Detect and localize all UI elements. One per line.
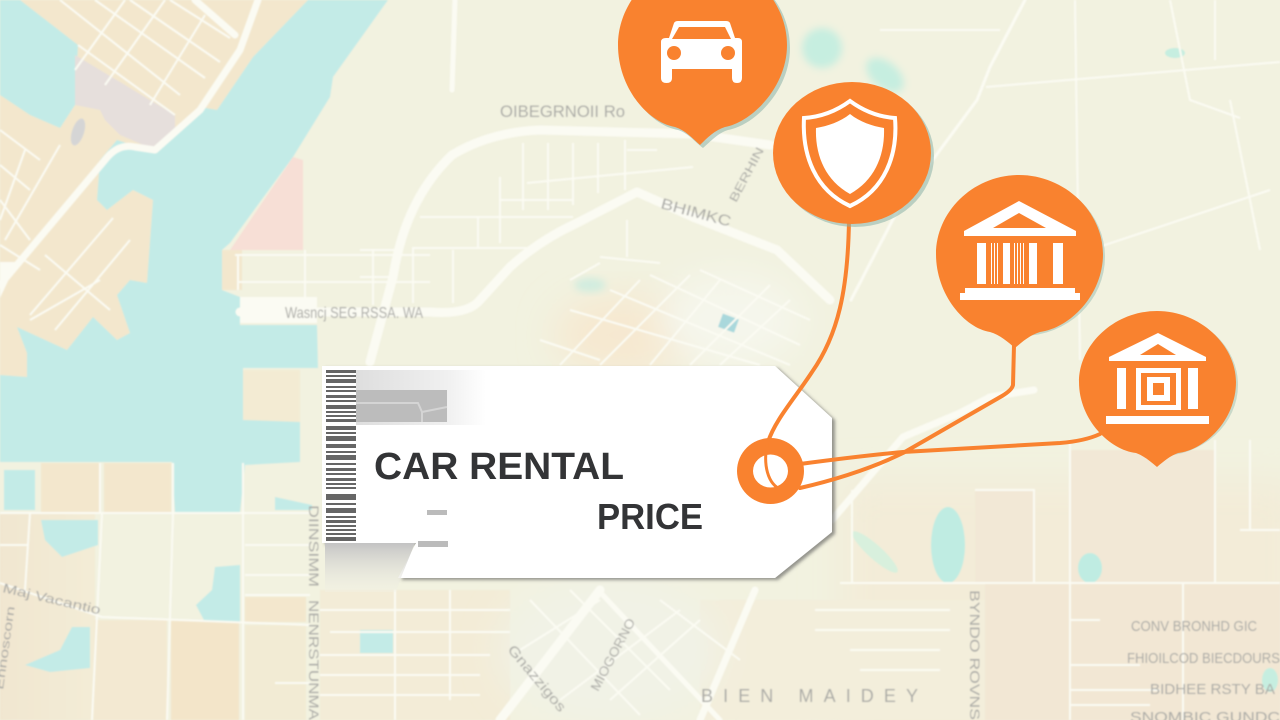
map label: south east neighbourhood: BIEN MAIDEY [701,686,923,706]
pin: car [618,0,790,148]
barcode [326,370,356,541]
map label: vertical by tag: DIINSIMM [306,505,322,587]
icon: small bank [1106,333,1209,424]
pin: bank [936,175,1105,348]
heading: car rental: CAR RENTAL [374,446,624,488]
map label: south centre diagonal: Gnazzigos [505,642,570,715]
map: lower right warm tint [840,480,1280,720]
map label: south centre reverse diagonal: MIOGORNO [587,616,638,693]
map label: south east list one: CONV BRONHD GIC [1131,618,1257,635]
map: pale south downtown wash [500,580,720,720]
tag body [322,366,832,578]
price tag [322,366,832,592]
icon: car [661,21,742,83]
map: road slip patches [0,262,317,323]
map: pale green ponds [574,28,1278,692]
pin: shield [773,82,934,227]
tag grey block [356,390,447,422]
string to small bank pin [800,434,1100,464]
map label: diagonal street: BERHIN [726,145,767,204]
map: soft orange district tint [555,295,695,375]
icon: shield [804,101,895,206]
map: colored land patches [75,55,175,150]
heading: price: PRICE [597,496,703,537]
map label: south east list three: BIDHEE RSTY BA [1150,681,1275,698]
map label: vertical east: BYNDO ROVNS [967,590,983,720]
tag grey fade header [356,370,486,425]
string to bank pin [800,345,1014,488]
map label: top centre: OIBEGRNOII Ro [500,102,625,121]
pin: small bank [1079,311,1238,467]
ring eyelet [737,438,804,504]
map label: west road: Wasncj SEG RSSA. WA [285,305,423,322]
map label: south west road: Maj Vacantio [1,580,102,617]
icon: bank [960,201,1080,300]
string to shield pin [768,220,849,442]
map label: centre street: BHIMKC [659,195,733,231]
map: river and bay water [0,0,393,672]
tag fade beneath barcode [325,543,415,592]
map label: vertical lower: NENRSTUNMA [306,600,322,720]
map: pale downtown wash [660,275,800,365]
connector strings [768,220,1100,488]
tag grey ticks [418,510,448,547]
